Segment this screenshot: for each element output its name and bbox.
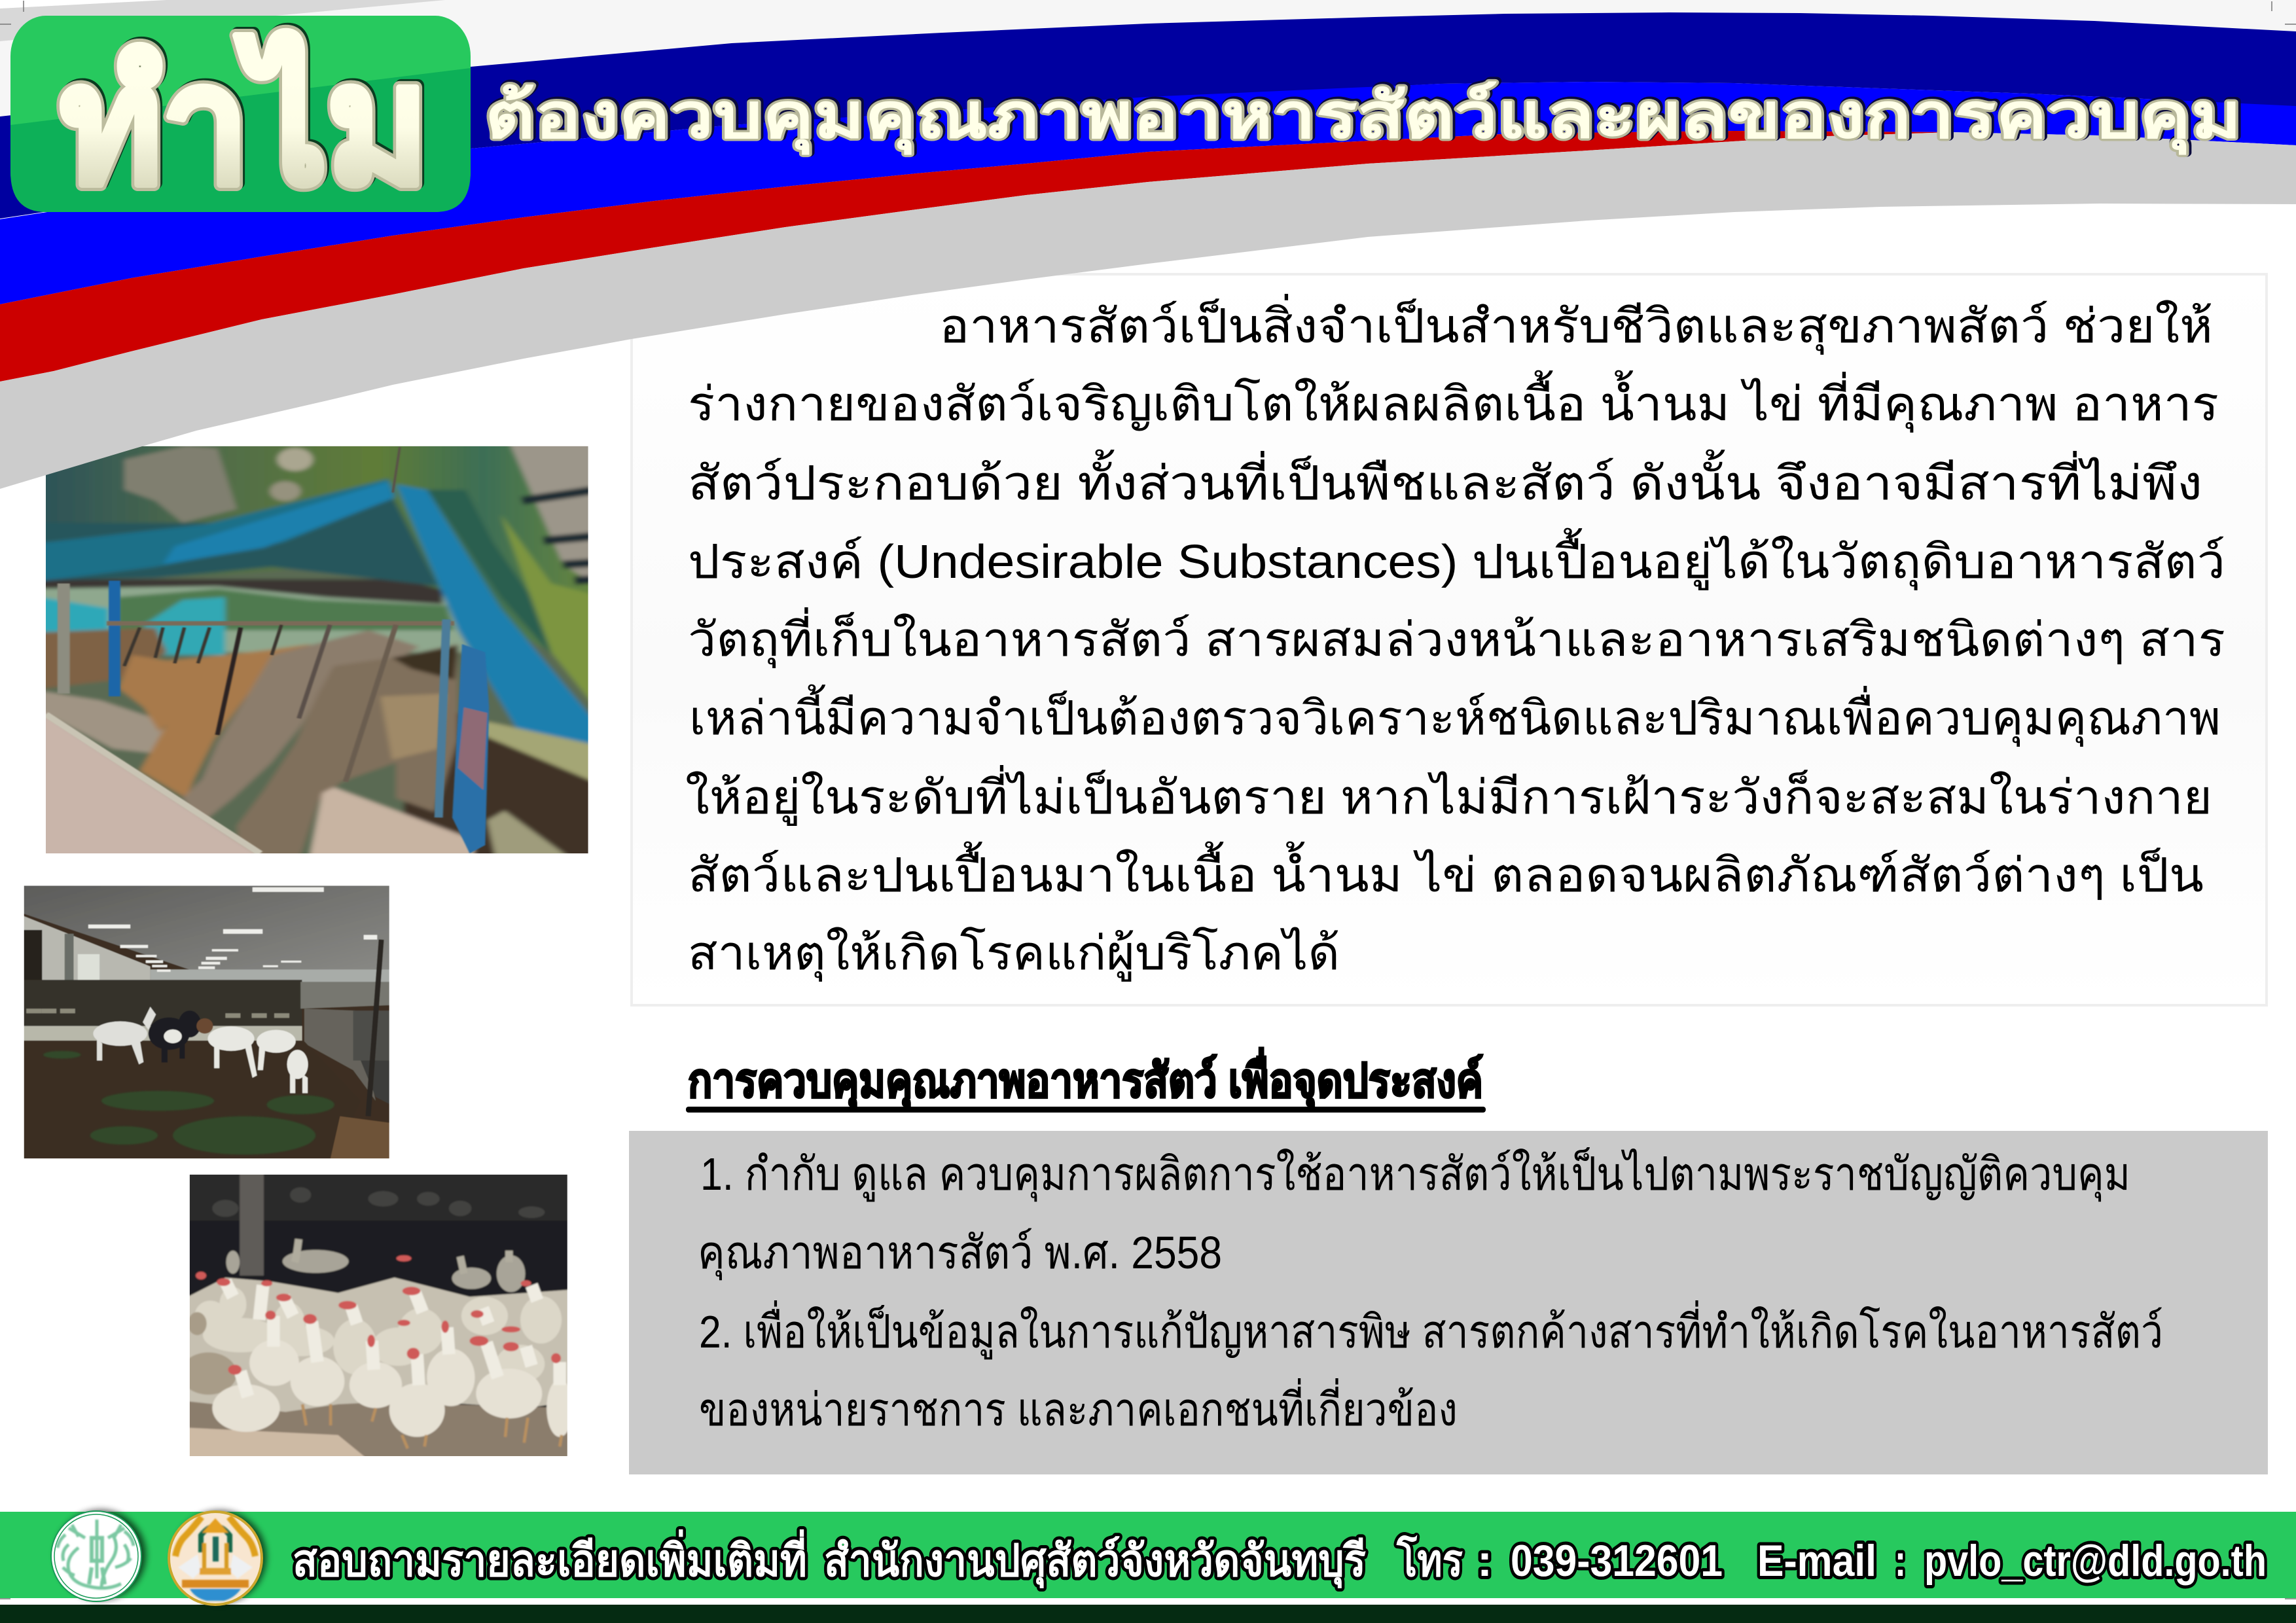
logo: Department of Livestock seal (white and green) bbox=[51, 1510, 146, 1601]
objective 2: ของหน่ายราชการ และภาคเอกชนที่เกี่ยวข้อง bbox=[699, 1378, 1458, 1435]
photo: goats in a barn bbox=[15, 878, 398, 1166]
footer contact text: 039-312601 bbox=[1511, 1536, 1723, 1586]
footer contact text: โทร bbox=[1396, 1535, 1463, 1586]
background top light strip bbox=[0, 0, 2296, 131]
intro paragraph lines: เหล่านี้มีความจำเป็นต้องตรวจวิเคราะห์ชนิดและปริมาณเพื่อควบคุมคุณภาพ bbox=[689, 684, 2221, 747]
intro paragraph lines: สาเหตุให้เกิดโรคแก่ผู้บริโภคได้ bbox=[688, 926, 1340, 982]
header swoosh: red band bbox=[0, 131, 1953, 382]
intro paragraph lines bbox=[685, 294, 2225, 982]
title badge: green rounded box with word "ทำไม" bbox=[10, 16, 471, 217]
photo: muscovy ducks bbox=[190, 1174, 567, 1456]
panel: introduction text bbox=[632, 274, 2267, 1005]
title word: ทำไม bbox=[60, 31, 429, 217]
header swoosh: bright blue band bbox=[0, 82, 2296, 304]
footer contact text: : bbox=[1895, 1536, 1906, 1586]
panel: objectives list bbox=[629, 1131, 2268, 1474]
header swoosh: dark blue band bbox=[0, 12, 2296, 219]
intro paragraph lines: สัตว์ประกอบด้วย ทั้งส่วนที่เป็นพืชและสัตว์ ดังนั้น จึงอาจมีสารที่ไม่พึง bbox=[688, 449, 2202, 510]
objective 1: คุณภาพอาหารสัตว์ พ.ศ. 2558 bbox=[698, 1227, 1222, 1281]
section heading with underline: การควบคุมคุณภาพอาหารสัตว์ เพื่อจุดประสงค์ bbox=[688, 1047, 1483, 1111]
footer contact text: สำนักงานปศุสัตว์จังหวัดจันทบุรี bbox=[824, 1536, 1366, 1588]
headline text: ต้องควบคุมคุณภาพอาหารสัตว์และผลของการควบคุม bbox=[485, 81, 2242, 155]
intro paragraph lines: สัตว์และปนเปื้อนมาในเนื้อ น้ำนม ไข่ ตลอดจนผลิตภัณฑ์สัตว์ต่างๆ เป็น bbox=[688, 841, 2204, 902]
footer contact text: : bbox=[1477, 1536, 1492, 1586]
headline text: ต้องควบคุมคุณภาพอาหารสัตว์และผลของการควบคุม bbox=[486, 80, 2243, 154]
logo: Ministry of Agriculture seal (gold and blue) bbox=[169, 1510, 266, 1605]
intro paragraph lines: ประสงค์ (Undesirable Substances) ปนเปื้อนอยู่ได้ในวัตถุดิบอาหารสัตว์ bbox=[688, 527, 2225, 590]
footer contact text bbox=[293, 1529, 2267, 1588]
header swoosh: gray band bbox=[0, 132, 2296, 489]
intro paragraph lines: ให้อยู่ในระดับที่ไม่เป็นอันตราย หากไม่มีการเฝ้าระวังก็จะสะสมในร่างกาย bbox=[685, 765, 2212, 826]
intro paragraph lines: อาหารสัตว์เป็นสิ่งจำเป็นสำหรับชีวิตและสุขภาพสัตว์ ช่วยให้ bbox=[939, 294, 2213, 355]
footer dark green strip bbox=[0, 1605, 2296, 1623]
footer green contact bar bbox=[0, 1512, 2296, 1598]
intro paragraph lines: ร่างกายของสัตว์เจริญเติบโตให้ผลผลิตเนื้อ น้ำนม ไข่ ที่มีคุณภาพ อาหาร bbox=[688, 370, 2219, 433]
objective 2 bbox=[699, 1300, 2163, 1435]
title word outline: ทำไม bbox=[60, 31, 429, 217]
objective 1: 1. กำกับ ดูแล ควบคุมการผลิตการใช้อาหารสัตว์ให้เป็นไปตามพระราชบัญญัติควบคุม bbox=[700, 1147, 2130, 1202]
title word shadow: ทำไม bbox=[62, 29, 431, 215]
footer contact text: สอบถามรายละเอียดเพิ่มเติมที่ bbox=[293, 1529, 807, 1586]
footer contact text: E-mail bbox=[1757, 1536, 1876, 1586]
intro paragraph lines: วัตถุที่เก็บในอาหารสัตว์ สารผสมล่วงหน้าและอาหารเสริมชนิดต่างๆ สาร bbox=[688, 607, 2225, 668]
photo: cows in a stall bbox=[46, 446, 588, 853]
objective 1 bbox=[698, 1147, 2130, 1281]
